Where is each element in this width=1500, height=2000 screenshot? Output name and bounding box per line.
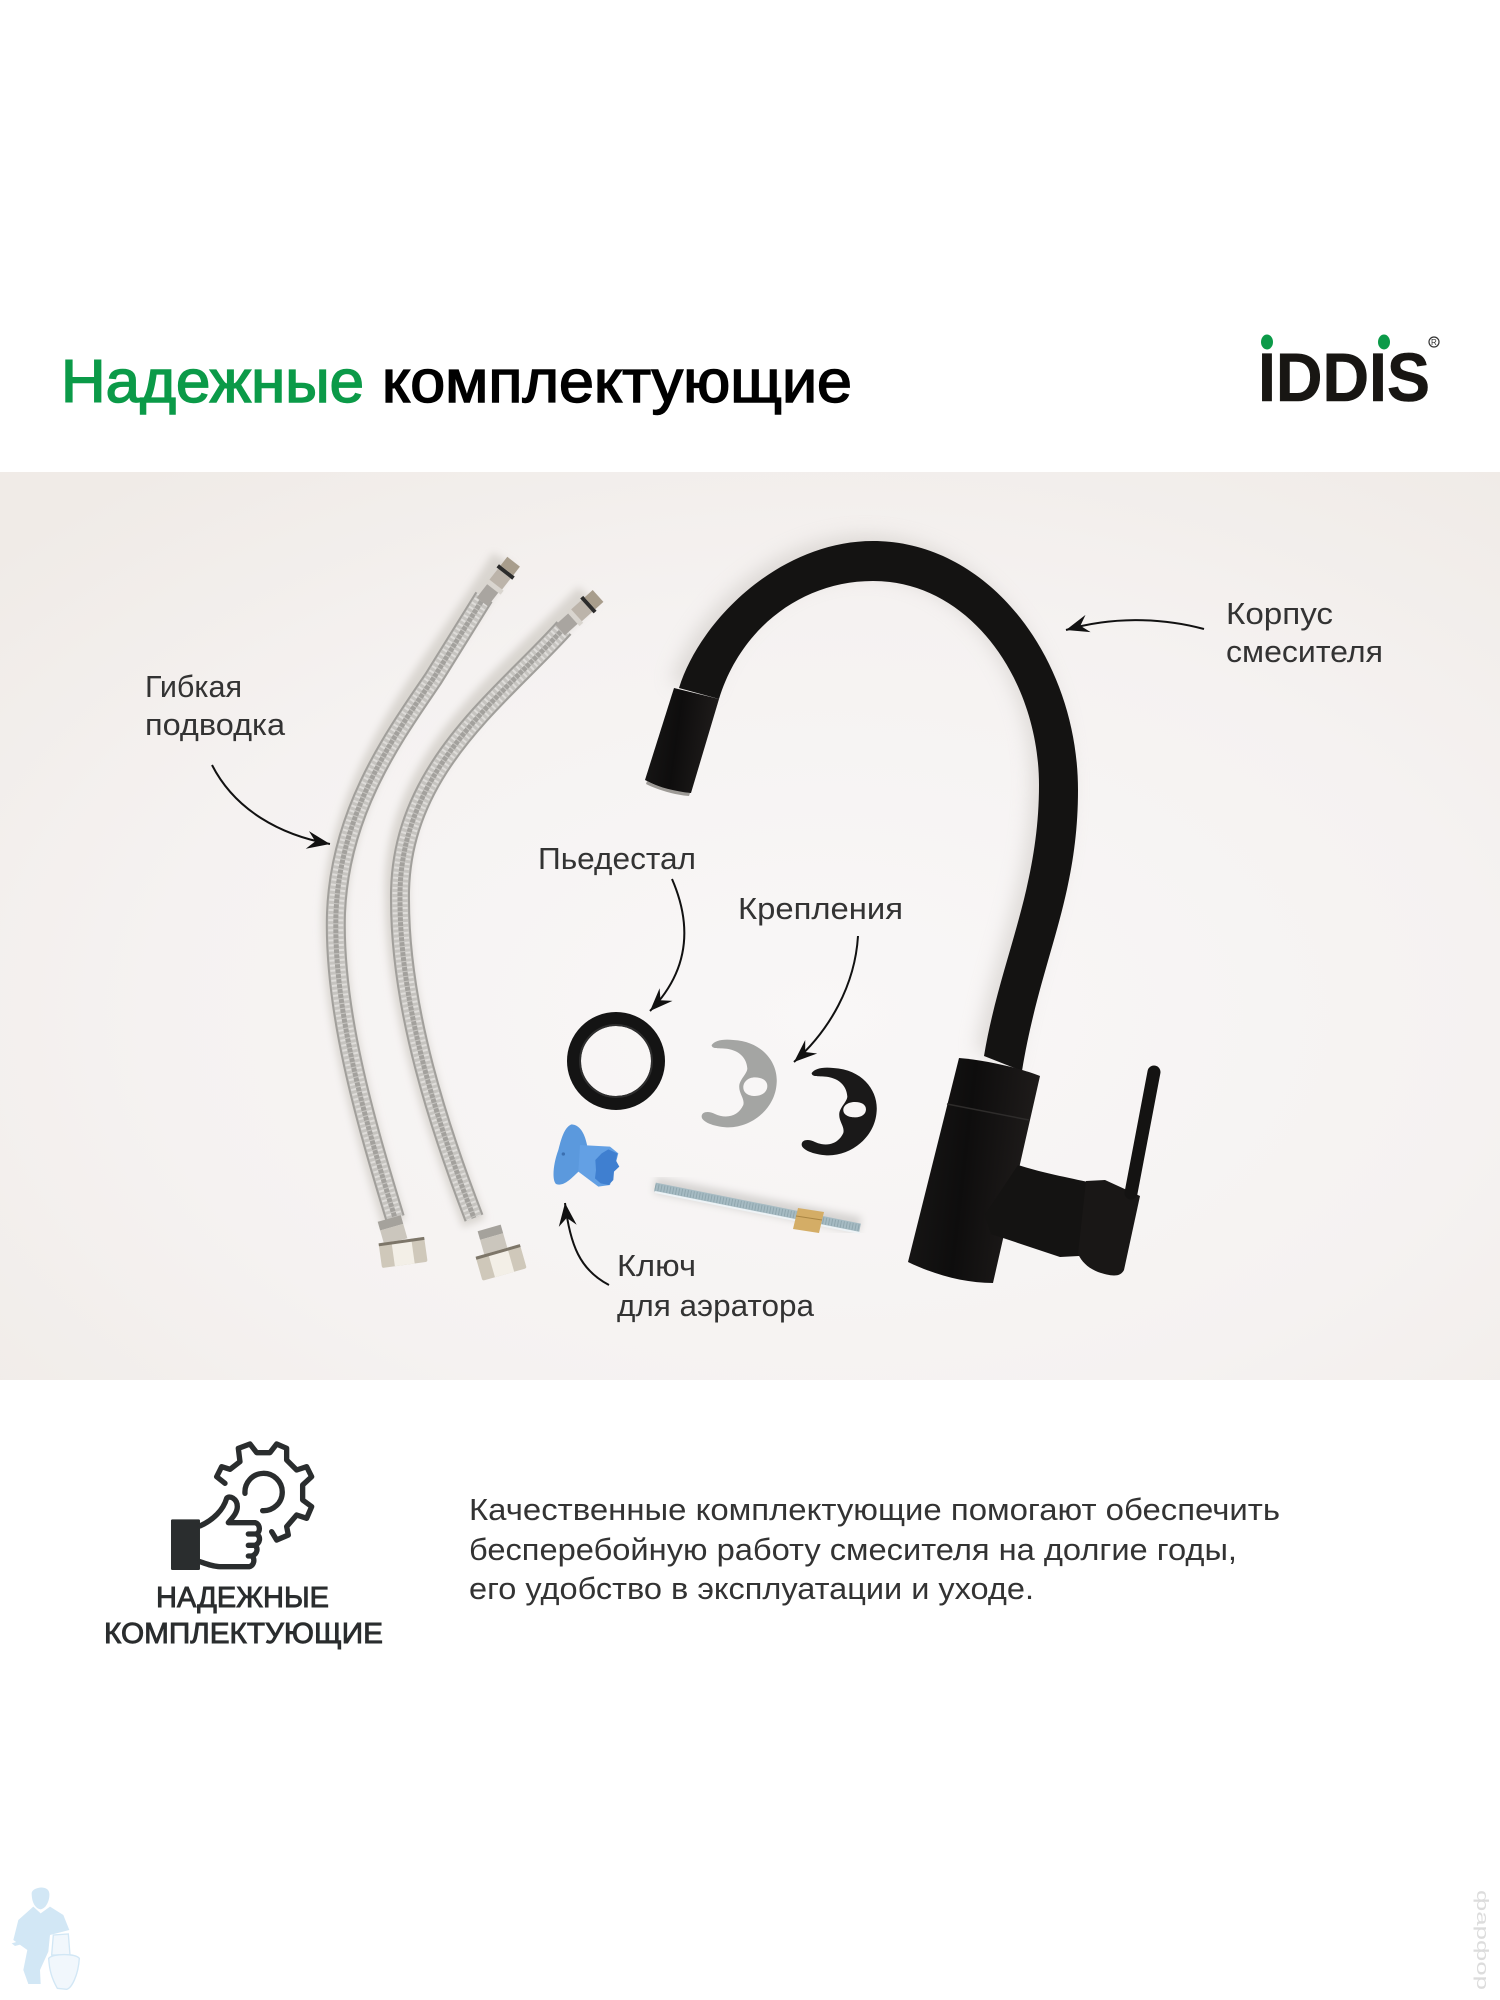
part: faucet body and spout: [645, 535, 1154, 1283]
heading: black word: комплектующие: [382, 348, 852, 415]
part: black mounting plate: [802, 1068, 877, 1155]
heading: green word: Надежные: [61, 348, 364, 415]
hand outline: [200, 1497, 260, 1567]
label: aerator key: [617, 1248, 815, 1323]
hose 1: [336, 597, 484, 1218]
logo: IDDIS: IDDIS: [1258, 339, 1430, 416]
flexible spout: [679, 541, 1078, 1071]
nozzle: [645, 688, 719, 793]
arrow: flexible hoses: [212, 765, 330, 844]
label: faucet body: [1226, 596, 1383, 669]
icon: thumbs up with gear: [171, 1444, 312, 1570]
hose 1 top fitting: [474, 556, 522, 608]
hose 1 bottom nut: [375, 1212, 428, 1268]
label: pedestal: Пьедестал: [538, 841, 696, 876]
handle head: [1078, 1180, 1140, 1276]
logo: IDDIS: R: [1431, 338, 1437, 347]
cuff: [171, 1519, 200, 1570]
plumber body: [13, 1907, 69, 1984]
label: flexible hoses: подводка: [145, 707, 286, 742]
part: aerator key: [554, 1124, 619, 1187]
icon caption: КОМПЛЕКТУЮЩИЕ: [104, 1618, 383, 1650]
hose 2 top fitting: [553, 589, 605, 637]
arrow: aerator key: [565, 1203, 609, 1285]
watermark: plumber with toilet: [12, 1888, 79, 1989]
base cylinder: [908, 1058, 1040, 1283]
label: faucet body: Корпус: [1226, 596, 1333, 631]
base seam: [947, 1104, 1029, 1120]
gear outline: [217, 1444, 312, 1540]
connector arm: [985, 1165, 1088, 1257]
text block: description: Качественные комплектующие помогают обеспечить: [469, 1492, 1280, 1527]
text block: description: бесперебойную работу смесителя на долгие годы,: [469, 1532, 1237, 1567]
arrow: pedestal: [650, 879, 684, 1011]
text block: description: [469, 1492, 1280, 1606]
label: mounts: Крепления: [738, 891, 903, 926]
photo background: [0, 472, 1500, 1380]
arrow: mounts: [794, 936, 858, 1062]
panel: product photo: [0, 472, 1500, 1380]
toilet tank: [52, 1934, 70, 1955]
heading: [61, 348, 852, 415]
lever: [1131, 1072, 1154, 1193]
label: aerator key: Ключ: [617, 1248, 696, 1283]
label: flexible hoses: [145, 669, 286, 742]
gear inner arc: [245, 1473, 282, 1511]
icon caption: НАДЕЖНЫЕ: [156, 1582, 329, 1614]
hose 2: [400, 628, 564, 1218]
label: aerator key: для аэратора: [617, 1288, 815, 1323]
icon caption: [104, 1582, 383, 1650]
part: metal mounting plate: [702, 1040, 777, 1127]
part: flexible hoses: [334, 556, 605, 1281]
wrench: [12, 1935, 43, 1946]
arrow: faucet body: [1066, 620, 1204, 630]
text block: description: его удобство в эксплуатации и уходе.: [469, 1571, 1034, 1606]
label: flexible hoses: Гибкая: [145, 669, 242, 704]
aerator tip: [646, 781, 690, 796]
plumber head: [32, 1888, 49, 1909]
hose 2 bottom nut: [469, 1221, 527, 1281]
label: faucet body: смесителя: [1226, 634, 1383, 669]
part: threaded stud with brass nut: [655, 1185, 860, 1233]
part: pedestal ring: [574, 1019, 658, 1103]
toilet bowl: [49, 1955, 79, 1989]
watermark: vertical site mark: фарфор: [1473, 1890, 1492, 1990]
